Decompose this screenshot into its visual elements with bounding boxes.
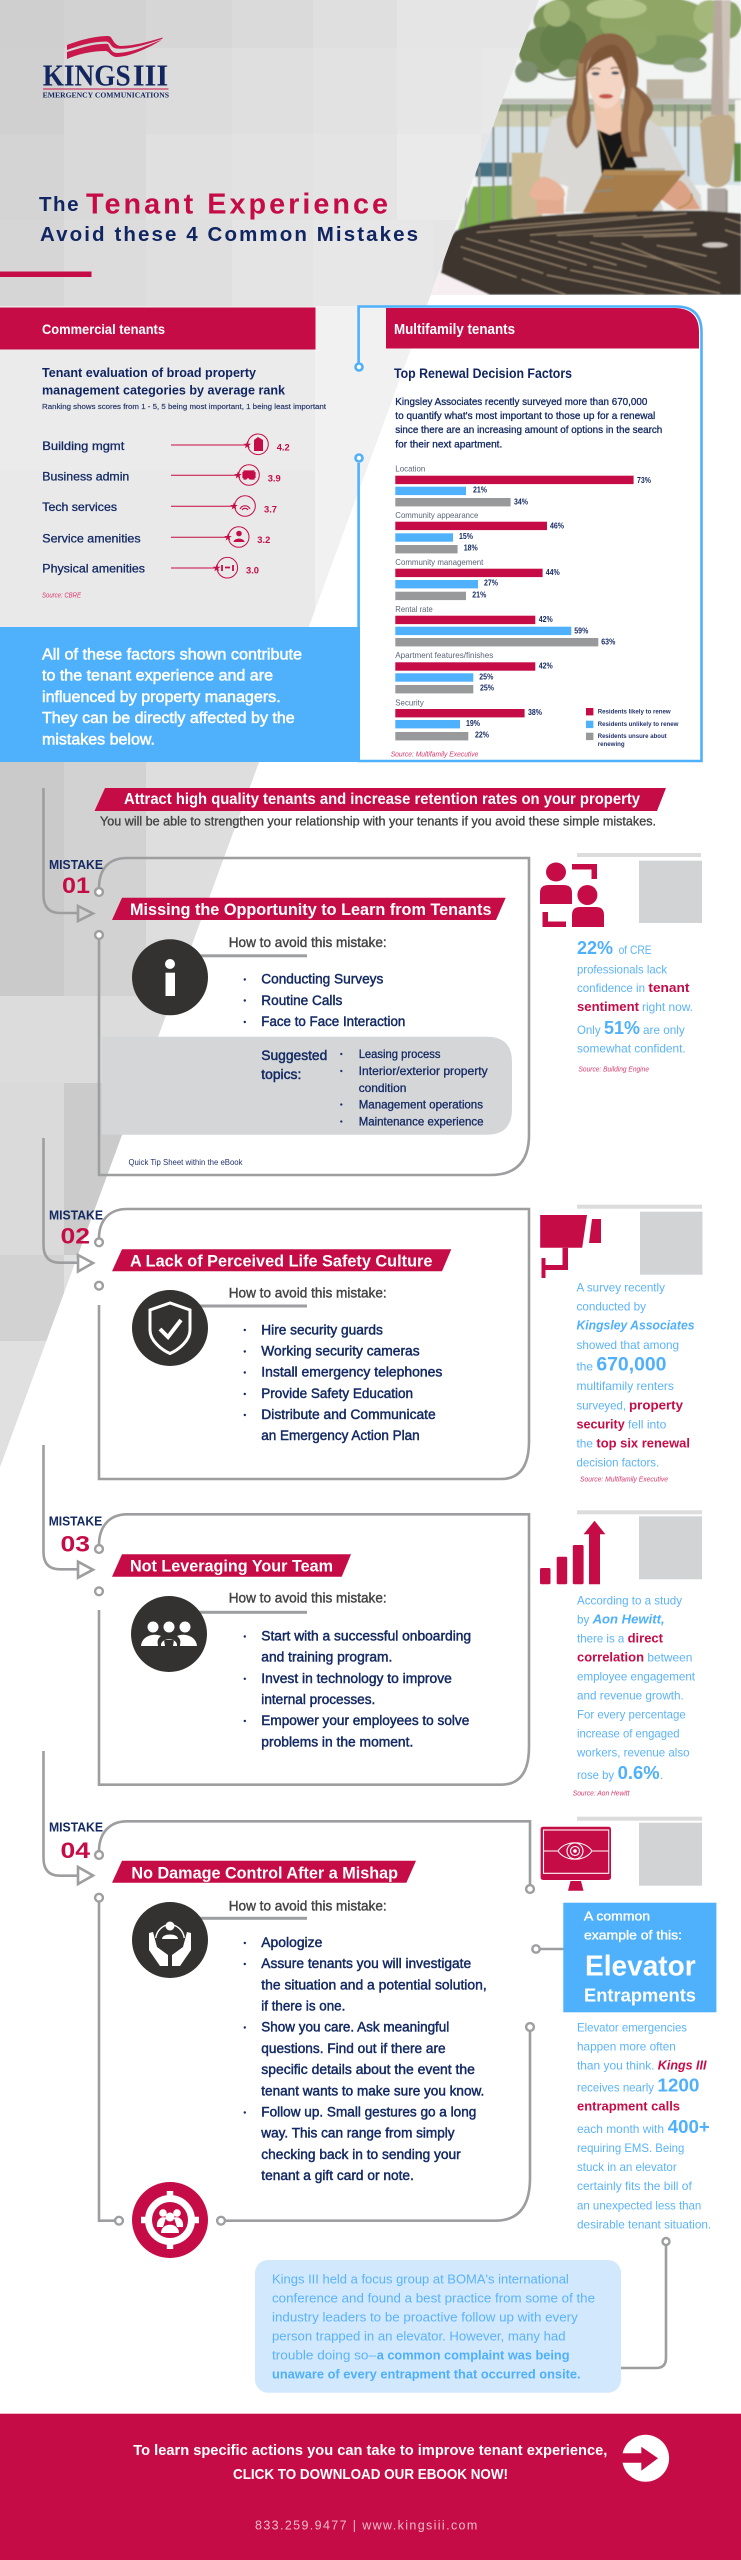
label: mistake 01: [49, 858, 103, 898]
clipboard: [583, 170, 686, 214]
sidebar: tenant sentiment stat: confidence in: [577, 981, 645, 995]
group: apartment features: 25%: [479, 672, 493, 681]
group: community management: Community management: [395, 557, 484, 567]
sidebar: security stat: Kingsley Associates: [576, 1317, 694, 1332]
list: avoid mistake 01: Conducting Surveys: [261, 972, 384, 987]
arrow: connector into mistake 04: [44, 1751, 93, 1884]
sidebar: tenant sentiment stat: Only: [577, 1023, 601, 1037]
sidebar: security stat: the: [576, 1436, 593, 1450]
hair: [567, 33, 653, 157]
list: avoid mistake 03: Invest in technology to improve: [261, 1671, 452, 1686]
sidebar: elevator example: 1200: [657, 2076, 699, 2096]
group: location: Location: [395, 464, 426, 474]
sidebar: security stat: [540, 1205, 702, 1483]
frame: blue outline with nodes: [356, 306, 702, 761]
row: physical amenities: 3.0: [246, 565, 259, 576]
sidebar: engagement stat: For every percentage: [577, 1708, 686, 1722]
group: rental rate: 42%: [539, 615, 553, 624]
panel: multifamily tenants: [356, 306, 702, 761]
row: service amenities: Service amenities: [42, 531, 141, 545]
callout: elevator entrapments: A common: [584, 1909, 650, 1924]
group: security: Security: [395, 697, 424, 707]
sidebar: security stat: security: [576, 1417, 625, 1431]
title: Tenant Experience: [86, 188, 388, 220]
list: avoid mistake 03: [244, 1629, 471, 1749]
text: download prompt: [133, 2442, 607, 2483]
list: avoid mistake 04: questions. Find out if there are: [261, 2041, 446, 2056]
group: community management: 21%: [472, 590, 486, 599]
label: mistake 04: [49, 1821, 103, 1863]
callout: focus group best practice: industry leaders to be proactive follow up with every: [272, 2309, 578, 2324]
list: avoid mistake 04: Follow up. Small gestures go a long: [261, 2105, 476, 2120]
background: grey patchwork: [0, 0, 539, 1467]
sidebar: elevator example: happen more often: [577, 2039, 676, 2053]
panel: mistake 03: [44, 1445, 702, 1797]
legend: [586, 708, 679, 748]
list: avoid mistake 02: Distribute and Communicate: [261, 1407, 436, 1422]
row: business admin: Business admin: [42, 470, 129, 484]
blazer: [539, 112, 604, 212]
far bank: [493, 110, 736, 128]
list: avoid mistake 02: Provide Safety Education: [261, 1386, 413, 1401]
sidebar: engagement stat: Source: Aon Hewitt: [573, 1790, 630, 1797]
sidebar: tenant sentiment stat: professionals lack: [577, 962, 668, 976]
banner: attract high quality tenants: Attract high quality tenants and increase retention rates on your property: [124, 791, 640, 808]
sidebar: engagement stat: According to a study: [577, 1593, 682, 1607]
group: security: 22%: [475, 730, 489, 739]
banner: perceived life safety culture: A Lack of Perceived Life Safety Culture: [130, 1253, 432, 1271]
list: avoid mistake 02: Hire security guards: [261, 1322, 383, 1337]
label: mistake 02: 02: [60, 1223, 90, 1248]
sidebar: elevator example: desirable tenant situation.: [577, 2217, 711, 2231]
list: avoid mistake 01: Routine Calls: [261, 993, 343, 1008]
text: survey description: to quantify what's most important to those up for a renewal: [395, 410, 655, 422]
header: commercial tenants: Commercial tenants: [42, 321, 165, 337]
group: community management: 27%: [484, 579, 498, 588]
group: rental rate: 63%: [601, 637, 615, 646]
sidebar: engagement stat: there is a: [577, 1632, 625, 1646]
row: business admin: 3.9: [268, 473, 281, 484]
icon: team: [131, 1596, 307, 1672]
callout: elevator entrapments: example of this:: [584, 1927, 682, 1942]
group: community appearance: 15%: [459, 532, 473, 541]
group: location: 73%: [637, 476, 651, 485]
icon: shield check: [132, 1290, 307, 1366]
title: Avoid these 4 Common Mistakes: [40, 223, 418, 246]
legend: renewing: [598, 741, 625, 748]
arrow: connector into mistake 01: [44, 788, 93, 921]
list: avoid mistake 03: Start with a successful onboarding: [261, 1629, 471, 1644]
sidebar: security stat: top six renewal: [596, 1436, 690, 1450]
neck: [593, 100, 623, 135]
header: multifamily tenants: Multifamily tenants: [394, 322, 515, 338]
sidebar: elevator example: than you think.: [577, 2058, 654, 2072]
heading: top renewal decision factors: Top Renewal Decision Factors: [394, 366, 572, 381]
sidebar: elevator example: 400+: [668, 2117, 710, 2137]
sidebar: engagement stat: employee engagement: [577, 1670, 696, 1684]
arrow: connector into mistake 02: [44, 1138, 93, 1272]
panel: mistake 01: [44, 788, 702, 1175]
source: Multifamily Executive: Source: Multifamily Executive: [391, 752, 479, 759]
sidebar: elevator example: [532, 1817, 716, 2231]
header: multifamily tenants: [386, 308, 699, 348]
list: avoid mistake 01: [244, 972, 405, 1029]
tree foliage: [515, 0, 741, 82]
panel: suggested topics: Leasing process: [359, 1047, 440, 1061]
logo: Kings III: III: [133, 58, 168, 92]
sidebar: security stat: Source: Multifamily Executive: [580, 1476, 668, 1483]
heading: how to avoid: How to avoid this mistake:: [229, 1285, 387, 1301]
icon: info: [132, 939, 307, 1015]
icon: arrow button: [621, 2435, 669, 2482]
list: avoid mistake 04: checking back in to sending your: [261, 2147, 461, 2162]
callout: focus group best practice: [255, 2260, 621, 2393]
header: commercial tenants: [0, 308, 316, 350]
sidebar: engagement stat: increase of engaged: [577, 1727, 680, 1741]
sidebar: tenant sentiment stat: are only: [643, 1023, 685, 1037]
logo flag: [67, 36, 163, 59]
list: avoid mistake 04: [244, 1935, 487, 2183]
sidebar: engagement stat: Aon Hewitt,: [592, 1611, 665, 1626]
text: survey description: for their next apartment.: [395, 438, 502, 450]
callout: elevator entrapments: Elevator: [585, 1951, 696, 1983]
panel: suggested topics: condition: [359, 1081, 406, 1095]
icon: rising bars: [540, 1521, 605, 1584]
callout: blue factors statement: All of these factors shown contribute: [42, 646, 302, 663]
sidebar: security stat: surveyed,: [576, 1398, 626, 1412]
sidebar: tenant sentiment stat: right now.: [642, 1000, 693, 1014]
label: mistake 01: MISTAKE: [49, 858, 103, 872]
row: tech services: Tech services: [42, 500, 117, 514]
icon: monitor with eye: [541, 1827, 611, 1891]
sidebar: engagement stat: between: [647, 1651, 692, 1665]
water: [477, 127, 741, 185]
source: CBRE: Source: CBRE: [42, 593, 81, 600]
sidebar: security stat: the: [576, 1359, 593, 1373]
legend: Residents likely to renew: [598, 708, 672, 715]
group: apartment features: 25%: [480, 684, 494, 693]
title: The: [39, 193, 78, 216]
label: mistake 02: MISTAKE: [49, 1208, 103, 1222]
group: community management: [395, 557, 560, 600]
note: quick tip sheet: Quick Tip Sheet within the eBook: [128, 1157, 243, 1167]
sidebar: tenant sentiment stat: 22%: [577, 938, 613, 958]
chart: renewal decision factors: [395, 464, 651, 740]
legend: Residents unlikely to renew: [598, 721, 679, 728]
sidebar: engagement stat: workers, revenue also: [576, 1746, 690, 1760]
panel: suggested topics: [102, 1037, 512, 1135]
panel: mistake 02: [44, 1138, 702, 1483]
sidebar: elevator example: receives nearly: [577, 2081, 654, 2095]
subheading: strengthen relationship: You will be able to strengthen your relationship with your tenants if you avoid these simple mistakes.: [100, 814, 656, 829]
row: service amenities: [42, 527, 270, 547]
group: location: 21%: [473, 486, 487, 495]
banner: missing the opportunity: Missing the Opportunity to Learn from Tenants: [130, 901, 492, 919]
callout: focus group best practice: unaware of every entrapment that occurred onsite.: [272, 2367, 581, 2382]
table: [433, 211, 741, 295]
group: community management: 44%: [546, 568, 560, 577]
list: avoid mistake 04: Apologize: [261, 1935, 322, 1950]
list: avoid mistake 04: tenant wants to make sure you know.: [261, 2083, 484, 2098]
list: avoid mistake 02: an Emergency Action Plan: [261, 1428, 420, 1443]
sidebar: tenant sentiment stat: somewhat confident.: [577, 1042, 686, 1056]
group: rental rate: [395, 604, 615, 646]
sidebar: security stat: fell into: [628, 1417, 667, 1431]
sidebar: tenant sentiment stat: tenant: [648, 981, 690, 995]
callout: elevator entrapments: [563, 1903, 716, 2012]
row: tech services: [42, 496, 277, 516]
frame: mistake 02: [95, 1209, 529, 1479]
chart: average rank rows: [42, 434, 290, 578]
sidebar: security stat: conducted by: [576, 1300, 646, 1314]
banner: attract high quality tenants: [94, 788, 666, 811]
sidebar: tenant sentiment stat: 51%: [604, 1018, 640, 1038]
sidebar: elevator example: requiring EMS. Being: [577, 2141, 684, 2155]
callout: focus group best practice: Kings III held a focus group at BOMA's international: [272, 2271, 569, 2286]
list: avoid mistake 03: problems in the moment.: [261, 1734, 413, 1749]
arms and hands: [536, 197, 564, 214]
sidebar: elevator example: an unexpected less than: [577, 2198, 701, 2212]
text: survey description: Kingsley Associates recently surveyed more than 670,000: [395, 396, 647, 408]
icon: people with brackets: [540, 862, 604, 927]
sidebar: tenant sentiment stat: Source: Building Engine: [578, 1066, 649, 1073]
list: avoid mistake 04: tenant a gift card or note.: [261, 2168, 414, 2183]
list: avoid mistake 03: internal processes.: [261, 1692, 375, 1707]
group: community appearance: 46%: [550, 522, 564, 531]
heading: how to avoid: How to avoid this mistake:: [229, 934, 387, 950]
banner: not leveraging your team: Not Leveraging Your Team: [130, 1558, 333, 1576]
sidebar: elevator example: Elevator emergencies: [577, 2020, 687, 2034]
list: avoid mistake 03: Empower your employees to solve: [261, 1713, 469, 1728]
panel: mistake 04: [44, 1751, 716, 2393]
sidebar: elevator example: certainly fits the bill of: [577, 2179, 692, 2193]
sidebar: elevator example: Kings III: [658, 2057, 707, 2072]
list: avoid mistake 01: Face to Face Interaction: [261, 1014, 405, 1029]
logo: Kings III: EMERGENCY COMMUNICATIONS: [43, 90, 169, 99]
connector: sidebar to focus group box: [620, 2238, 670, 2368]
callout: focus group best practice: a common complaint was being: [377, 2348, 570, 2363]
row: building mgmt: 4.2: [277, 442, 290, 453]
building: [647, 79, 683, 99]
banner: no damage control: No Damage Control After a Mishap: [131, 1864, 398, 1882]
label: mistake 03: 03: [60, 1532, 90, 1557]
text: download prompt: CLICK TO DOWNLOAD OUR EBOOK NOW!: [233, 2466, 508, 2483]
sidebar: security stat: A survey recently: [576, 1281, 665, 1295]
logo: Kings III: KINGS: [43, 58, 131, 92]
row: business admin: [42, 465, 281, 485]
frame: mistake 04: [95, 1821, 534, 2225]
group: apartment features: 42%: [539, 662, 553, 671]
frame: mistake 01: [95, 858, 529, 1175]
group: security: 19%: [466, 719, 480, 728]
contact: phone and website: 833.259.9477 | www.kingsiii.com: [255, 2518, 477, 2532]
legend: Residents unsure about: [598, 733, 667, 740]
sidebar: tenant sentiment stat: [540, 853, 702, 1073]
panel: suggested topics: Maintenance experience: [359, 1115, 484, 1129]
icon: caring hands: [132, 1902, 307, 1978]
heading: tenant evaluation: management categories by average rank: [42, 382, 286, 397]
connector: box to panel: [532, 1945, 564, 1953]
label: mistake 01: 01: [62, 873, 90, 898]
callout: focus group best practice: person trapped in an elevator. However, many had: [272, 2329, 566, 2344]
sidebar: engagement stat: rose by: [577, 1768, 614, 1782]
heading: tenant evaluation: [42, 365, 327, 411]
sidebar: engagement stat: .: [660, 1768, 663, 1782]
sidebar: security stat: 670,000: [596, 1354, 666, 1375]
row: building mgmt: Building mgmt: [42, 439, 125, 453]
group: community appearance: Community appearance: [395, 510, 479, 520]
sidebar: tenant sentiment stat: sentiment: [577, 1000, 640, 1014]
list: avoid mistake 02: Install emergency telephones: [261, 1365, 443, 1380]
eyes and mouth: [592, 72, 600, 75]
heading: tenant evaluation: Tenant evaluation of broad property: [42, 365, 257, 380]
sidebar: engagement stat: and revenue growth.: [577, 1689, 684, 1703]
callout: blue factors statement: to the tenant experience and are: [42, 668, 273, 685]
bench: [475, 163, 512, 177]
sidebar: engagement stat: direct: [628, 1632, 664, 1646]
callout: blue factors statement: They can be directly affected by the: [42, 710, 295, 727]
chair: [512, 153, 542, 218]
shirt: [597, 129, 637, 174]
list: avoid mistake 04: specific details about the event the: [261, 2062, 475, 2077]
sidebar: elevator example: stuck in an elevator: [577, 2160, 677, 2174]
label: mistake 04: MISTAKE: [49, 1821, 103, 1835]
icon: red target with group: [132, 2182, 208, 2258]
list: avoid mistake 04: Show you care. Ask meaningful: [261, 2020, 449, 2035]
panel: suggested topics: Interior/exterior property: [359, 1064, 488, 1078]
label: mistake 04: 04: [60, 1838, 91, 1863]
callout: blue factors statement: influenced by property managers.: [42, 689, 281, 706]
sidebar: security stat: decision factors.: [576, 1455, 659, 1469]
sidebar: elevator example: each month with: [577, 2122, 664, 2136]
list: avoid mistake 04: Assure tenants you will investigate: [261, 1956, 471, 1971]
label: mistake 03: [49, 1515, 102, 1557]
text: survey description: [395, 396, 662, 450]
sidebar: engagement stat: correlation: [577, 1651, 644, 1665]
group: security: [395, 697, 542, 740]
row: physical amenities: Physical amenities: [42, 562, 145, 576]
label: mistake 02: [49, 1208, 103, 1248]
list: avoid mistake 04: way. This can range from simply: [260, 2126, 455, 2141]
title: [39, 188, 418, 246]
panel: suggested topics: Management operations: [359, 1098, 483, 1112]
group: location: 34%: [514, 498, 528, 507]
callout: elevator entrapments: Entrapments: [584, 1985, 696, 2006]
necklace: [598, 130, 622, 167]
heading: how to avoid: How to avoid this mistake:: [229, 1897, 387, 1913]
list: avoid mistake 02: Working security cameras: [261, 1344, 420, 1359]
list: avoid mistake 03: and training program.: [261, 1650, 392, 1665]
group: apartment features: Apartment features/finishes: [395, 650, 493, 660]
sidebar: security stat: showed that among: [576, 1338, 679, 1352]
arrow: connector into mistake 03: [44, 1445, 93, 1578]
group: rental rate: 59%: [574, 626, 588, 635]
umbrella pole: [710, 0, 724, 116]
row: building mgmt: [42, 434, 290, 455]
sidebar: elevator example: entrapment calls: [577, 2100, 680, 2114]
list: avoid mistake 02: [244, 1322, 443, 1443]
banner: not leveraging your team: [112, 1554, 351, 1577]
railing: [502, 99, 741, 104]
sidebar: engagement stat: 0.6%: [618, 1763, 660, 1783]
text: download prompt: To learn specific actions you can take to improve tenant experience,: [133, 2442, 607, 2459]
panel: suggested topics: Suggested: [261, 1048, 327, 1063]
callout: focus group best practice: conference and found a best practice from some of the: [272, 2290, 595, 2305]
photo: woman with clipboard at a patio table: [430, 0, 741, 300]
sidebar: engagement stat: by: [577, 1612, 589, 1626]
frame: mistake 03: [95, 1514, 529, 1785]
sidebar: security stat: property: [629, 1398, 683, 1412]
group: rental rate: Rental rate: [395, 604, 433, 614]
callout: blue factors statement: mistakes below.: [42, 731, 155, 748]
row: physical amenities: [42, 557, 259, 578]
fringe: [587, 45, 628, 100]
list: avoid mistake 04: if there is one.: [261, 1998, 345, 2013]
sidebar: security stat: multifamily renters: [576, 1379, 674, 1393]
group: community appearance: 18%: [464, 544, 478, 553]
callout: focus group best practice: trouble doing so–: [272, 2348, 377, 2363]
list: avoid mistake 04: the situation and a potential solution,: [261, 1977, 487, 1992]
sidebar: engagement stat: [540, 1510, 702, 1797]
label: mistake 03: MISTAKE: [49, 1515, 102, 1529]
face: [587, 51, 625, 109]
row: service amenities: 3.2: [257, 535, 270, 546]
callout: blue factors statement: [0, 627, 360, 762]
footer: call to action: [0, 2414, 741, 2560]
group: security: 38%: [528, 708, 542, 717]
text: survey description: since there are an increasing amount of options in the search: [395, 424, 662, 436]
group: apartment features: [395, 650, 553, 693]
group: location: [395, 464, 651, 507]
icon: security camera: [540, 1215, 601, 1278]
row: tech services: 3.7: [264, 504, 277, 515]
panel: suggested topics: topics:: [261, 1067, 301, 1082]
heading: tenant evaluation: Ranking shows scores from 1 - 5, 5 being most important, 1 being least important: [42, 402, 327, 411]
logo: Kings III: [43, 36, 169, 99]
panel: commercial tenants: [0, 308, 327, 600]
group: community appearance: [395, 510, 564, 553]
heading: how to avoid: How to avoid this mistake:: [229, 1590, 387, 1606]
sidebar: tenant sentiment stat: of CRE: [619, 943, 652, 957]
grass: [457, 185, 513, 233]
